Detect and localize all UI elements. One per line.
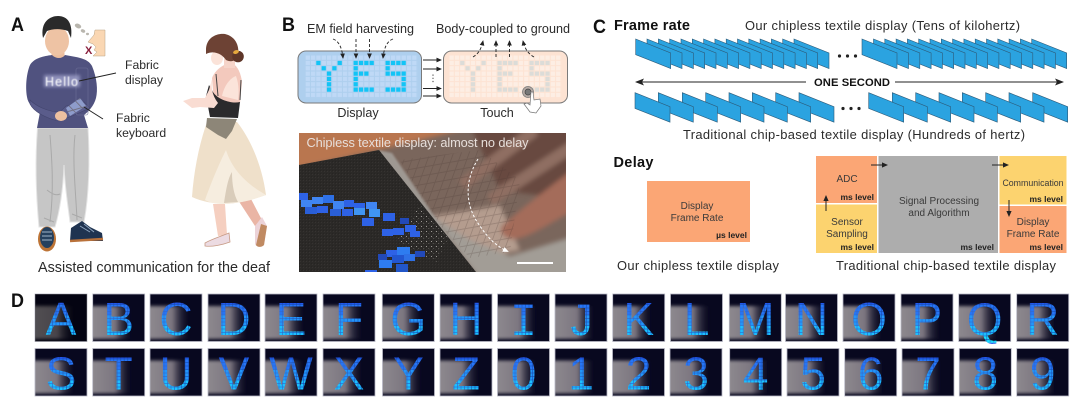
panel letter C: C — [593, 17, 606, 38]
block: signal processing: ms level — [960, 242, 994, 252]
photo: chipless textile display: Chipless textile display: almost no delay — [306, 135, 529, 150]
woman figure — [183, 34, 267, 247]
chipless delay block: Display — [681, 201, 713, 212]
label: touch: Touch — [480, 106, 514, 120]
arrow: one second — [635, 77, 1064, 89]
label: fabric display: display — [125, 73, 164, 87]
chipless delay block: µs level — [716, 230, 747, 240]
fabric keyboard on the arm — [66, 98, 86, 116]
letters S to Z and digits 0 to 9: 1 — [568, 348, 594, 400]
block: sensor sampling — [816, 204, 877, 253]
heading: body-coupled to ground: Body-coupled to ground — [436, 22, 570, 36]
panel D: character gallery — [11, 291, 1069, 400]
letters S to Z and digits 0 to 9 — [32, 348, 1069, 400]
label: fabric display — [79, 58, 164, 87]
label: fabric display: Fabric — [125, 58, 159, 72]
block: communication — [1000, 156, 1066, 204]
letters A to R: M — [736, 293, 774, 345]
block: sensor sampling: Sampling — [826, 229, 868, 240]
letters S to Z and digits 0 to 9: 0 — [511, 348, 536, 400]
label: fabric keyboard: keyboard — [116, 126, 166, 140]
letters S to Z and digits 0 to 9: 6 — [858, 348, 883, 400]
arrow: one second: ONE SECOND — [814, 77, 890, 89]
display module with YES pixels — [298, 51, 422, 103]
thought bubble with speech crossed out: X — [85, 45, 93, 57]
letters A to R: Q — [967, 293, 1003, 345]
block: communication: ms level — [1029, 194, 1063, 204]
block: sensor sampling: ms level — [840, 242, 874, 252]
label: fabric keyboard — [84, 107, 166, 140]
man figure — [26, 16, 103, 252]
letters S to Z and digits 0 to 9: 3 — [683, 348, 709, 400]
letters S to Z and digits 0 to 9: 5 — [800, 348, 826, 400]
letters A to R: G — [390, 293, 426, 345]
letters S to Z and digits 0 to 9: 9 — [1030, 348, 1055, 400]
low frame rate film strip — [635, 93, 1068, 122]
block: display frame rate: ms level — [1029, 242, 1063, 252]
chipless delay block — [647, 181, 750, 242]
block: sensor sampling: Sensor — [831, 217, 864, 228]
caption: our chipless textile display: Our chipless textile display — [617, 258, 780, 273]
photo: chipless textile display — [299, 133, 566, 272]
letters S to Z and digits 0 to 9: S — [46, 348, 76, 400]
fabric display on the shirt: Hello — [45, 75, 78, 89]
letters S to Z and digits 0 to 9: Z — [452, 348, 480, 400]
outgoing ground-coupling arrows — [473, 41, 534, 57]
touch module with YES pixels — [444, 51, 568, 103]
letters A to R: C — [159, 293, 193, 345]
letters A to R: D — [217, 293, 251, 345]
letters A to R: B — [103, 293, 134, 345]
letters A to R: F — [335, 293, 363, 345]
letters A to R: H — [449, 293, 483, 345]
letters S to Z and digits 0 to 9: 8 — [973, 348, 998, 400]
block: signal processing: and Algorithm — [908, 208, 970, 219]
block: display frame rate: Display — [1017, 217, 1049, 228]
label: traditional chip-based frame rate: Traditional chip-based textile display (Hundreds of hertz) — [683, 127, 1025, 142]
letters S to Z and digits 0 to 9: V — [219, 348, 250, 400]
letters S to Z and digits 0 to 9: 2 — [626, 348, 651, 400]
arrows between modules — [423, 60, 441, 96]
heading: delay: Delay — [614, 155, 654, 171]
caption: traditional chip-based textile display: Traditional chip-based textile display — [836, 258, 1057, 273]
thought bubble with speech crossed out — [74, 23, 105, 57]
letters A to R — [32, 293, 1069, 349]
panel letter B: B — [282, 15, 295, 36]
letters A to R: J — [567, 297, 595, 349]
panel C: frame rate and delay — [593, 17, 1068, 273]
panel B: display and touch — [282, 15, 575, 280]
heading: frame rate: Frame rate — [614, 18, 690, 34]
letters A to R: N — [795, 293, 828, 345]
block: display frame rate: Frame Rate — [1007, 229, 1060, 240]
letters S to Z and digits 0 to 9: U — [159, 348, 193, 400]
letters A to R: P — [912, 293, 942, 345]
block: signal processing: Signal Processing — [899, 196, 979, 207]
block: ADC — [816, 156, 877, 203]
icon: touching hand — [522, 86, 541, 113]
block: ADC: ADC — [836, 174, 858, 185]
panel letter A: A — [11, 15, 24, 36]
letters A to R: K — [623, 293, 654, 345]
letters A to R: A — [46, 293, 77, 345]
ellipsis top row — [838, 54, 857, 58]
high frame rate film strip — [636, 39, 1067, 68]
letters S to Z and digits 0 to 9: 7 — [915, 348, 941, 400]
caption: assisted communication: Assisted communication for the deaf — [38, 260, 271, 276]
heading: EM field harvesting: EM field harvesting — [307, 22, 414, 36]
chipless delay block: Frame Rate — [671, 213, 724, 224]
panel letter D: D — [11, 291, 24, 312]
letters S to Z and digits 0 to 9: T — [105, 348, 133, 400]
label: our chipless display frame rate: Our chipless textile display (Tens of kilohertz) — [745, 18, 1020, 33]
letters S to Z and digits 0 to 9: 4 — [743, 348, 768, 400]
letters A to R: O — [851, 293, 887, 345]
ellipsis bottom row — [841, 107, 861, 110]
letters A to R: I — [510, 297, 537, 349]
block: display frame rate — [1000, 206, 1066, 253]
block: signal processing — [878, 156, 998, 253]
panel A: assisted communication — [11, 15, 271, 276]
traditional delay chain — [816, 156, 1066, 253]
letters S to Z and digits 0 to 9: Y — [393, 348, 424, 400]
letters A to R: E — [276, 293, 306, 345]
letters A to R: L — [684, 293, 709, 345]
label: display: Display — [337, 106, 379, 120]
flow arrows — [826, 165, 1009, 216]
letters A to R: R — [1026, 293, 1059, 345]
letters S to Z and digits 0 to 9: W — [269, 348, 313, 400]
letters S to Z and digits 0 to 9: X — [334, 348, 364, 400]
block: communication: Communication — [1002, 178, 1064, 188]
incoming EM field arrows — [333, 39, 393, 58]
label: fabric keyboard: Fabric — [116, 111, 150, 125]
block: ADC: ms level — [840, 192, 874, 202]
